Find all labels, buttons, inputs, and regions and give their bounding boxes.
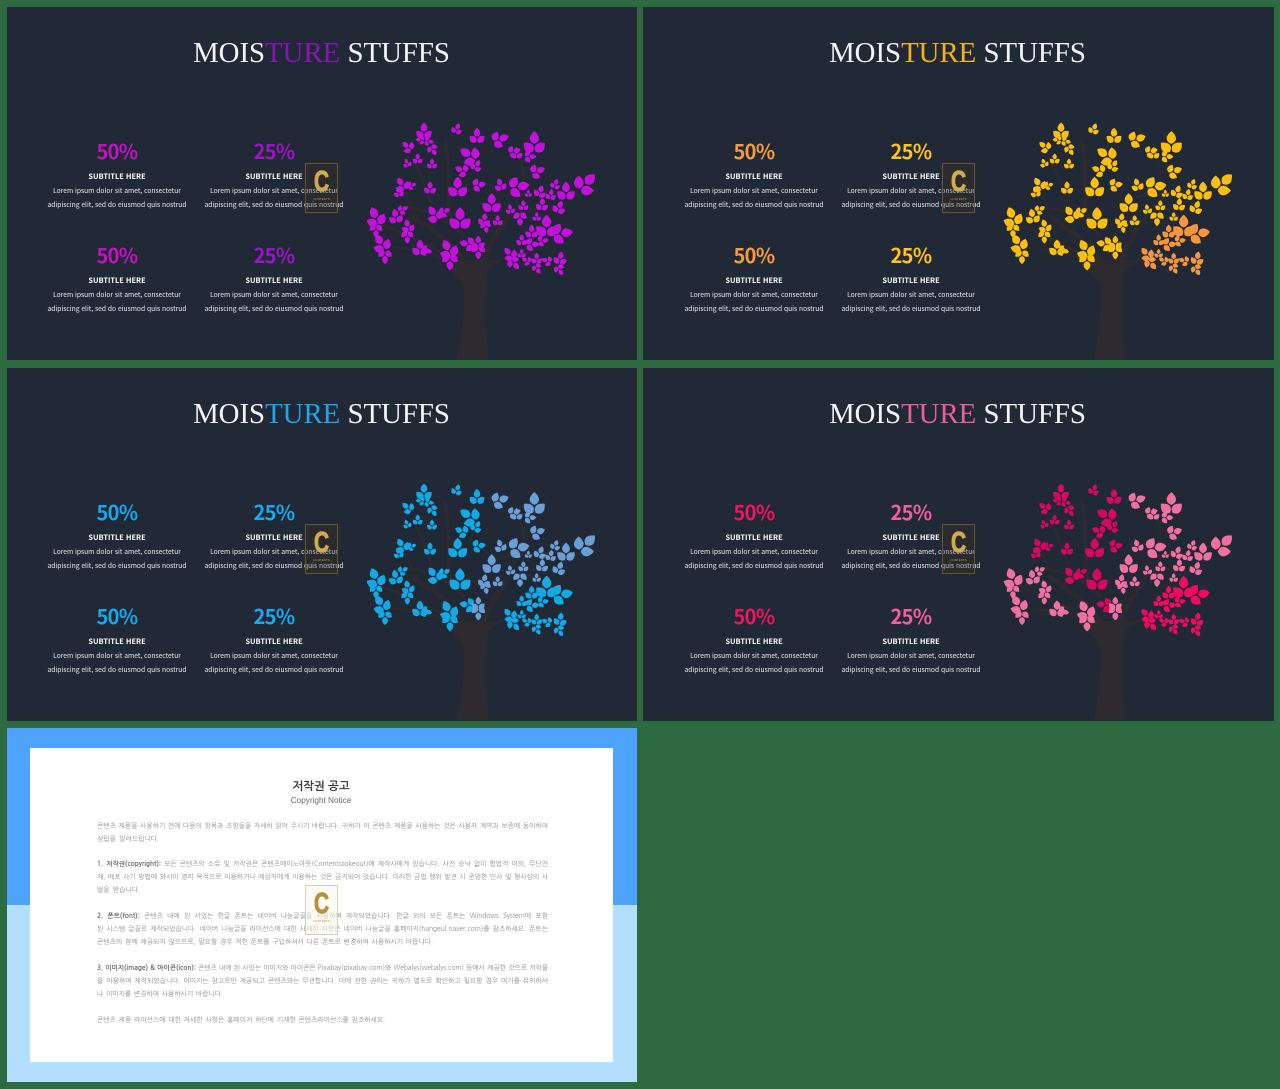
- stat: 50% bottom left: SUBTITLE HERE: [88, 636, 146, 647]
- stat: 25% bottom right: adipiscing elit, sed do eiusmod quis nostrud: [205, 302, 343, 312]
- notice paragraph: intro: [97, 822, 548, 842]
- watermark badge: C: [314, 527, 329, 559]
- title: MOISTURE STUFFS: [829, 37, 1086, 69]
- stat: 25% top right: [204, 136, 343, 208]
- stat: 50% bottom left: [684, 240, 823, 312]
- stat: 50% bottom left: Lorem ipsum dolor sit amet, consectetur: [690, 650, 818, 660]
- stat: 50% top left: adipiscing elit, sed do eiusmod quis nostrud: [685, 198, 823, 208]
- panel: blue moisture slide: [7, 368, 637, 721]
- stat: 50% top left: SUBTITLE HERE: [88, 532, 146, 543]
- notice paragraph: intro: 콘텐츠 제품을 사용하기 전에 다음의 항목과 조항들을 자세히 읽어 주시기 바랍니다. 귀하가 이 콘텐츠 제품을 사용하는 것은 사용자 계약과 보증에 동의하여: [97, 822, 548, 829]
- stat: 25% top right: adipiscing elit, sed do eiusmod quis nostrud: [842, 560, 980, 570]
- notice paragraph: copyright: [97, 860, 548, 893]
- stat: 25% top right: Lorem ipsum dolor sit amet, consectetur: [210, 184, 338, 194]
- stat: 50% top left: [684, 136, 823, 208]
- stat: 50% bottom left: adipiscing elit, sed do eiusmod quis nostrud: [685, 664, 823, 674]
- stat: 25% bottom right: Lorem ipsum dolor sit amet, consectetur: [847, 650, 975, 660]
- stat: 50% top left: Lorem ipsum dolor sit amet, consectetur: [53, 546, 181, 556]
- panel: purple moisture slide: [7, 7, 637, 360]
- stat: 25% bottom right: SUBTITLE HERE: [882, 275, 940, 286]
- stat: 50% bottom left: Lorem ipsum dolor sit amet, consectetur: [53, 650, 181, 660]
- panel: pink moisture slide: [643, 368, 1274, 721]
- light blue lower band: [7, 905, 637, 1082]
- stat: 50% bottom left: SUBTITLE HERE: [725, 636, 783, 647]
- stat: 25% top right: adipiscing elit, sed do eiusmod quis nostrud: [842, 198, 980, 208]
- title: MOISTURE STUFFS: [193, 398, 450, 430]
- stat: 25% bottom right: [204, 240, 343, 312]
- watermark badge: CONTENTS: [950, 558, 967, 562]
- stat: 25% bottom right: 25%: [253, 240, 295, 269]
- notice paragraph: font: 콘텐츠의 함께 제공되지 않으므로, 필요할 경우 적힌 폰트를 구입하셔서 다른 폰트로 변경하여 사용하시기 바랍니다.: [97, 938, 433, 945]
- stat: 25% bottom right: [204, 601, 343, 674]
- notice paragraph: images and icons: 3. 이미지(image) & 아이콘(icon): 콘텐츠 내에 된 사있는 이미지와 아이콘은 Pixabay(pixabay.com)와 Webalys(webalys.com) 등에서 제공한 것으로 저작물: [97, 964, 548, 971]
- panel: gold moisture slide: [643, 7, 1274, 360]
- stat: 50% top left: [684, 497, 823, 570]
- panel: copyright notice slide: [7, 728, 637, 1082]
- stat: 50% top left: SUBTITLE HERE: [725, 532, 783, 543]
- watermark badge: CONTENTS: [950, 197, 967, 201]
- watermark badge: C: [951, 527, 966, 559]
- notice paragraph: copyright: 벌을 받습니다.: [97, 886, 140, 893]
- stat: 50% bottom left: adipiscing elit, sed do eiusmod quis nostrud: [685, 302, 823, 312]
- notice paragraph: font: 2. 폰트(font): 콘텐츠 내에 된 서있는 한글 폰트는 네이버 나눔글꼴을 사용하여 제작되었습니다. 한글 외의 모든 폰트는 Windows System에 포함: [97, 912, 548, 919]
- stat: 50% bottom left: Lorem ipsum dolor sit amet, consectetur: [690, 288, 818, 298]
- watermark badge: [305, 524, 338, 574]
- stat: 50% top left: 50%: [733, 136, 775, 165]
- stat: 50% bottom left: [48, 240, 186, 312]
- title: MOISTURE STUFFS: [829, 398, 1086, 430]
- stat: 50% bottom left: 50%: [733, 601, 775, 630]
- notice paragraph: copyright: 재, 배포 사기 방법에 와서이 영리 목적으로 이용하거나 제삼자에게 이용하는 것은 금지되어 있습니다. 이러한 금법 행위 발견 시 준엄한 민사 및 형사상의 사: [97, 873, 548, 880]
- stat: 25% bottom right: Lorem ipsum dolor sit amet, consectetur: [210, 288, 338, 298]
- stat: 50% bottom left: Lorem ipsum dolor sit amet, consectetur: [53, 288, 181, 298]
- stat: 50% top left: Lorem ipsum dolor sit amet, consectetur: [690, 546, 818, 556]
- stat: 25% bottom right: Lorem ipsum dolor sit amet, consectetur: [847, 288, 975, 298]
- tree illustration: gold and orange leaves: [1004, 122, 1232, 360]
- stat: 25% top right: [204, 497, 343, 570]
- stat: 50% bottom left: 50%: [96, 601, 138, 630]
- stat: 25% top right: 25%: [890, 497, 932, 526]
- stat: 25% top right: [842, 497, 980, 570]
- stat: 25% bottom right: [842, 240, 980, 312]
- stat: 50% top left: [48, 136, 186, 208]
- stat: 25% top right: SUBTITLE HERE: [245, 532, 303, 543]
- watermark badge: CONTENTS: [313, 558, 330, 562]
- notice paragraph: copyright: 1. 저작권(copyright): 모든 콘텐츠의 소유 및 저작권은 콘텐츠메이노아웃(Contentstokeout)에 제작사에게 있습니다. 사전 승낙 없이 합법적 이외, 무단전: [97, 860, 548, 867]
- stat: 50% top left: adipiscing elit, sed do eiusmod quis nostrud: [48, 560, 186, 570]
- stat: 25% top right: [842, 136, 980, 208]
- stat: 25% top right: Lorem ipsum dolor sit amet, consectetur: [210, 546, 338, 556]
- tree illustration: purple leaves: [366, 122, 595, 360]
- stat: 25% top right: SUBTITLE HERE: [882, 532, 940, 543]
- stat: 25% top right: SUBTITLE HERE: [245, 171, 303, 182]
- notice heading: 저작권 공고: [292, 780, 350, 792]
- notice paragraph: font: 된 시스템 글꼴로 제작되었습니다. 네이버 나눔글꼴 라이선스에 대한 사세한 사항은 네이버 나눔글꼴 홈페이지(hangeul.naver.com)를 참조하세요. 폰트는: [97, 925, 548, 932]
- watermark badge: CONTENTS: [313, 197, 330, 201]
- stat: 50% top left: SUBTITLE HERE: [88, 171, 146, 182]
- stat: 50% bottom left: [48, 601, 186, 674]
- stat: 50% top left: SUBTITLE HERE: [725, 171, 783, 182]
- watermark badge: [942, 163, 975, 213]
- watermark badge on card: C: [314, 888, 329, 920]
- stat: 50% top left: 50%: [733, 497, 775, 526]
- notice paragraph: font: [97, 912, 548, 945]
- stat: 25% bottom right: SUBTITLE HERE: [882, 636, 940, 647]
- stat: 25% bottom right: adipiscing elit, sed do eiusmod quis nostrud: [205, 664, 343, 674]
- stat: 25% bottom right: Lorem ipsum dolor sit amet, consectetur: [210, 650, 338, 660]
- copyright notice card: [30, 748, 613, 1062]
- stat: 25% top right: 25%: [253, 497, 295, 526]
- watermark badge: [305, 163, 338, 213]
- stat: 25% top right: SUBTITLE HERE: [882, 171, 940, 182]
- watermark badge: C: [951, 166, 966, 198]
- stat: 50% top left: adipiscing elit, sed do eiusmod quis nostrud: [685, 560, 823, 570]
- stat: 50% bottom left: 50%: [733, 240, 775, 269]
- stat: 25% top right: Lorem ipsum dolor sit amet, consectetur: [847, 546, 975, 556]
- stat: 25% bottom right: 25%: [890, 601, 932, 630]
- stat: 25% top right: 25%: [890, 136, 932, 165]
- watermark badge on card: CONTENTS: [313, 919, 330, 923]
- tree illustration: cyan and steel blue leaves: [366, 484, 595, 721]
- watermark badge on card: [305, 885, 338, 935]
- notice paragraph: images and icons: 나 이미지를 변경하여 사용하시기 바랍니다.: [97, 990, 223, 997]
- stat: 25% bottom right: SUBTITLE HERE: [245, 636, 303, 647]
- stat: 25% bottom right: adipiscing elit, sed do eiusmod quis nostrud: [842, 664, 980, 674]
- stat: 50% bottom left: [684, 601, 823, 674]
- watermark badge: C: [314, 166, 329, 198]
- watermark badge: [942, 524, 975, 574]
- notice paragraph: images and icons: 을 이용하여 제작되었습니다. 이미지는 참고로만 제공되고 콘텐츠와는 무관합니다. 이에 관한 권리는 귀하가 별도로 확인하고 필요할 경우 여기를 유의하셔: [97, 977, 548, 984]
- stat: 25% bottom right: [842, 601, 980, 674]
- stat: 50% top left: 50%: [96, 497, 138, 526]
- stat: 25% top right: Lorem ipsum dolor sit amet, consectetur: [847, 184, 975, 194]
- stat: 25% bottom right: adipiscing elit, sed do eiusmod quis nostrud: [842, 302, 980, 312]
- stat: 50% bottom left: SUBTITLE HERE: [88, 275, 146, 286]
- notice paragraph: intro: 성립을 알려드립니다.: [97, 835, 159, 842]
- notice paragraph: images and icons: [97, 964, 548, 997]
- notice subheading: Copyright Notice: [291, 796, 351, 805]
- stat: 50% top left: [48, 497, 186, 570]
- stat: 50% top left: adipiscing elit, sed do eiusmod quis nostrud: [48, 198, 186, 208]
- stat: 50% top left: Lorem ipsum dolor sit amet, consectetur: [690, 184, 818, 194]
- stat: 50% top left: 50%: [96, 136, 138, 165]
- stat: 50% bottom left: adipiscing elit, sed do eiusmod quis nostrud: [48, 302, 186, 312]
- stat: 50% bottom left: adipiscing elit, sed do eiusmod quis nostrud: [48, 664, 186, 674]
- stat: 50% top left: Lorem ipsum dolor sit amet, consectetur: [53, 184, 181, 194]
- stat: 25% bottom right: 25%: [890, 240, 932, 269]
- notice paragraph: license: 콘텐츠 제품 라이선스에 대한 자세한 사항은 홈페이지 하단에 기재한 콘텐츠라이선스를 참조하세요.: [97, 1016, 385, 1023]
- stat: 25% top right: 25%: [253, 136, 295, 165]
- stat: 25% bottom right: SUBTITLE HERE: [245, 275, 303, 286]
- tree illustration: magenta and pink leaves: [1004, 484, 1232, 721]
- title: MOISTURE STUFFS: [193, 37, 450, 69]
- stat: 25% top right: adipiscing elit, sed do eiusmod quis nostrud: [205, 198, 343, 208]
- stat: 50% bottom left: 50%: [96, 240, 138, 269]
- stat: 25% top right: adipiscing elit, sed do eiusmod quis nostrud: [205, 560, 343, 570]
- stat: 50% bottom left: SUBTITLE HERE: [725, 275, 783, 286]
- stat: 25% bottom right: 25%: [253, 601, 295, 630]
